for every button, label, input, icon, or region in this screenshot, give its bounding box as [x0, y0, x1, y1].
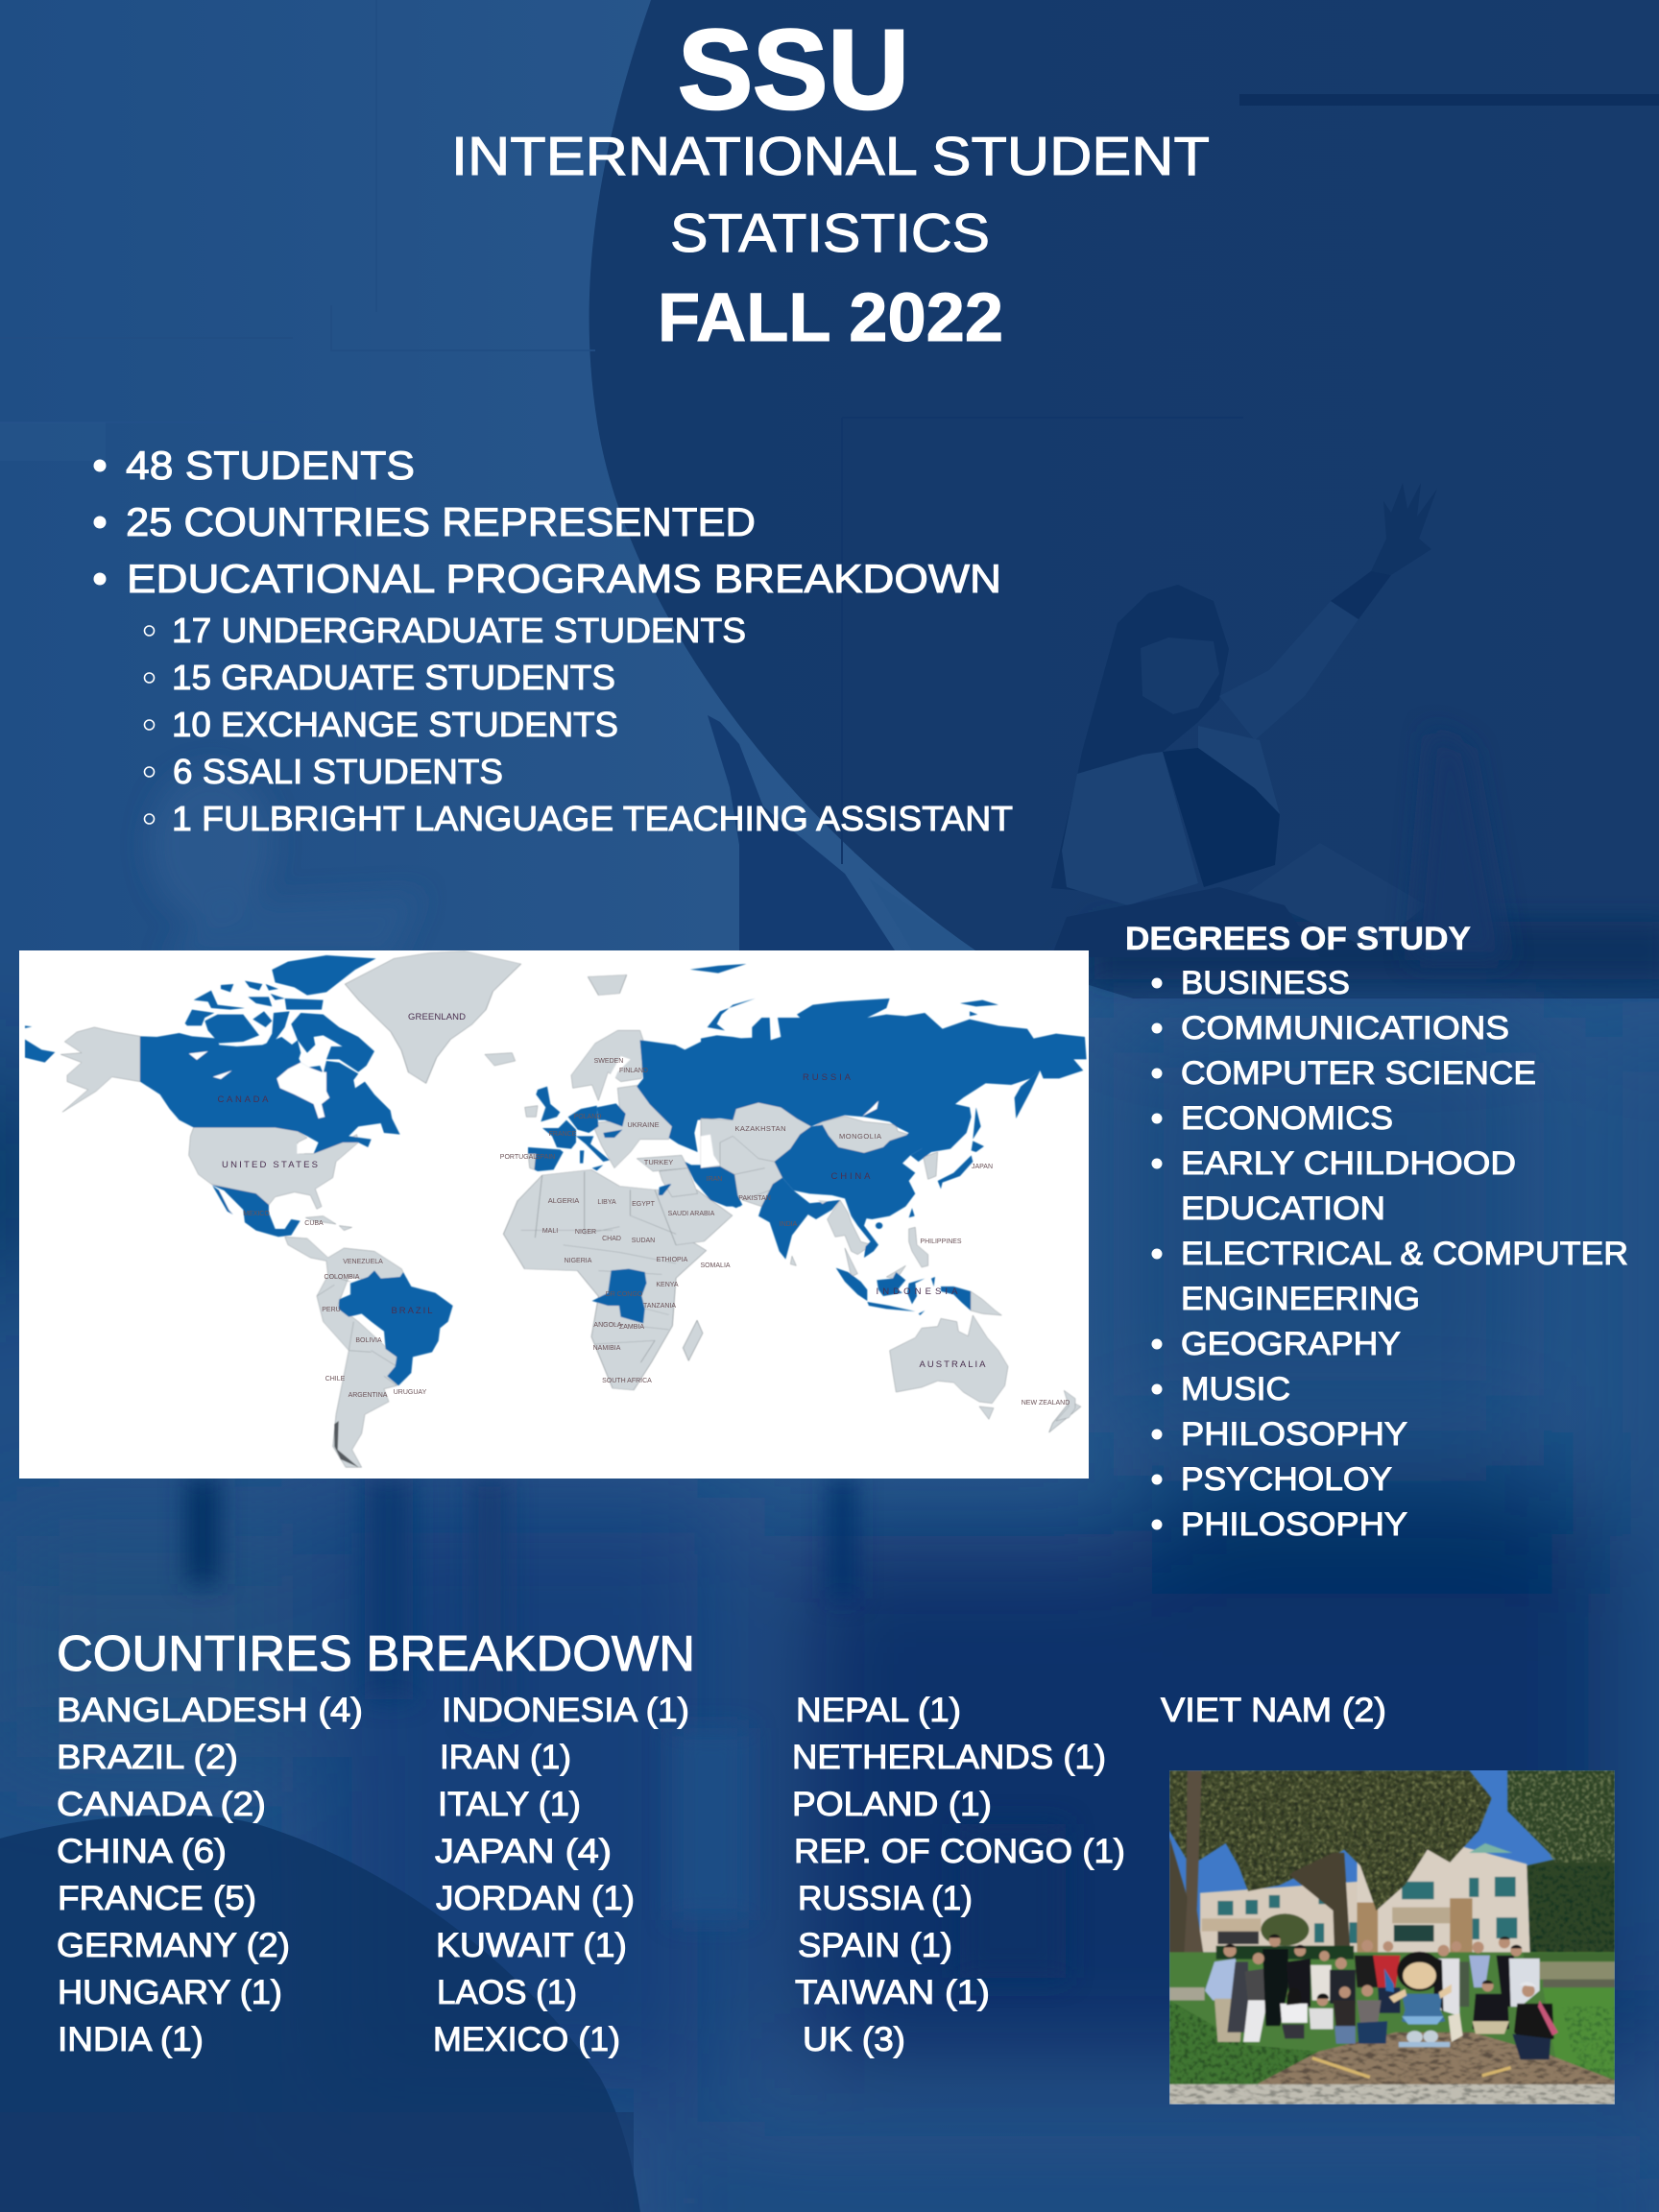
country column 1: GERMANY (2) [57, 1927, 290, 1964]
degrees list: BUSINESS [1181, 965, 1350, 1001]
mascot statue [1384, 1952, 1463, 2047]
country column 1: BANGLADESH (4) [57, 1692, 363, 1729]
map labels: KENYA [656, 1282, 679, 1288]
country column 2 [433, 1692, 689, 2058]
summary statistics list: 48 STUDENTS [126, 443, 415, 488]
map labels: SAUDI ARABIA [668, 1211, 715, 1217]
map labels: RUSSIA [803, 1072, 852, 1083]
degrees list: MUSIC [1181, 1371, 1290, 1407]
map labels: IRAN [707, 1176, 722, 1183]
country column 1: INDIA (1) [58, 2021, 204, 2058]
map labels: ETHIOPIA [657, 1257, 688, 1263]
map labels: SOUTH AFRICA [602, 1378, 652, 1384]
map labels: AUSTRALIA [920, 1359, 986, 1370]
map labels: KAZAKHSTAN [735, 1124, 785, 1133]
map labels: CHILE [325, 1376, 346, 1382]
Europe and Near East [485, 1030, 768, 1207]
map labels: LIBYA [597, 1199, 616, 1206]
map labels: JAPAN [972, 1164, 993, 1170]
heading: countires breakdown: COUNTIRES BREAKDOWN [57, 1626, 695, 1682]
map labels: FINLAND [619, 1068, 648, 1074]
map labels: GREENLAND [408, 1012, 466, 1022]
map labels: SWEDEN [594, 1058, 623, 1065]
map labels: PORTUGAL [500, 1154, 537, 1161]
subtitle: international student statistics: STATISTICS [670, 203, 990, 264]
country column 2: IRAN (1) [440, 1739, 571, 1776]
country column 3: POLAND (1) [792, 1786, 992, 1823]
map labels: NEW ZEALAND [1022, 1400, 1070, 1407]
degrees list: ELECTRICAL & COMPUTER [1181, 1236, 1628, 1272]
map labels: ANGOLA [593, 1322, 622, 1329]
map labels: NIGERIA [565, 1258, 592, 1264]
country column 3: REP. OF CONGO (1) [794, 1833, 1125, 1870]
educational programs sub-list: 6 SSALI STUDENTS [173, 752, 503, 791]
map labels: ZAMBIA [619, 1324, 644, 1331]
map labels: NIGER [575, 1229, 596, 1236]
map labels: FRANCE [549, 1131, 577, 1138]
country column 1: FRANCE (5) [58, 1880, 256, 1917]
classroom window frames [0, 0, 1243, 864]
country column 2: MEXICO (1) [433, 2021, 620, 2058]
decorative dark arc at lower left [0, 1815, 640, 2212]
map labels: DR CONGO [606, 1291, 643, 1298]
map labels: POLAND [574, 1114, 601, 1120]
dark bar at upper right [1239, 94, 1659, 106]
panel: world map of represented countries [19, 950, 1089, 1479]
map labels: CUBA [304, 1220, 324, 1227]
map labels: UNITED STATES [222, 1160, 318, 1170]
country column 2: JORDAN (1) [436, 1880, 635, 1917]
degrees list: COMPUTER SCIENCE [1181, 1055, 1536, 1092]
heading: degrees of study: DEGREES OF STUDY [1125, 921, 1471, 957]
map labels: MEXICO [243, 1211, 270, 1217]
Asia [701, 998, 1087, 1277]
map labels: TURKEY [644, 1158, 673, 1166]
map labels: ARGENTINA [349, 1392, 388, 1399]
country column 2: ITALY (1) [438, 1786, 581, 1823]
map labels: MONGOLIA [839, 1132, 881, 1141]
map labels: ALGERIA [548, 1196, 579, 1205]
map labels: CHAD [602, 1236, 621, 1242]
students [1205, 1935, 1558, 2059]
educational programs sub-list: 10 EXCHANGE STUDENTS [172, 705, 618, 744]
subtitle: fall 2022: FALL 2022 [658, 280, 1003, 356]
summary statistics list: EDUCATIONAL PROGRAMS BREAKDOWN [127, 556, 1001, 601]
country column 1: CANADA (2) [57, 1786, 266, 1823]
Southeast Asia and Oceania [836, 1265, 1075, 1421]
summary statistics list [94, 443, 1013, 838]
educational programs sub-list: 1 FULBRIGHT LANGUAGE TEACHING ASSISTANT [172, 799, 1013, 838]
degrees list: PHILOSOPHY [1181, 1506, 1407, 1543]
degrees list: PSYCHOLOY [1181, 1461, 1392, 1498]
country column 3: RUSSIA (1) [798, 1880, 973, 1917]
photo: group of international students at campus [1169, 1770, 1615, 2104]
map labels: URUGUAY [394, 1389, 427, 1396]
North America [25, 955, 400, 1237]
map labels: NAMIBIA [593, 1345, 621, 1352]
summary statistics list: 25 COUNTRIES REPRESENTED [126, 499, 756, 544]
map labels [217, 1012, 1070, 1407]
degrees list: EARLY CHILDHOOD [1181, 1145, 1516, 1182]
country column 3: UK (3) [803, 2021, 905, 2058]
country column 2: JAPAN (4) [435, 1833, 612, 1870]
degrees list: ENGINEERING [1181, 1281, 1420, 1317]
map labels: INDIA [780, 1221, 798, 1228]
map labels: PHILIPPINES [920, 1238, 962, 1245]
lighter wedge between hand and dark circle [869, 878, 975, 950]
map labels: VENEZUELA [343, 1259, 383, 1265]
raised hand silhouette at map top [708, 715, 895, 950]
map labels: SUDAN [632, 1238, 655, 1244]
map labels: BOLIVIA [355, 1337, 382, 1344]
country column 2: INDONESIA (1) [442, 1692, 689, 1729]
country column 4: VIET NAM (2) [1161, 1692, 1386, 1729]
educational programs sub-list [144, 611, 1013, 838]
educational programs sub-list: 15 GRADUATE STUDENTS [172, 658, 615, 697]
map labels: PAKISTAN [738, 1195, 771, 1202]
country column 1: CHINA (6) [57, 1833, 227, 1870]
map labels: CHINA [831, 1171, 871, 1182]
country column 2: KUWAIT (1) [436, 1927, 627, 1964]
educational programs sub-list: 17 UNDERGRADUATE STUDENTS [172, 611, 746, 650]
blurred raised hands and heads [149, 730, 1507, 1978]
woman presenter silhouette [1051, 483, 1437, 957]
subtitle: international student statistics [451, 126, 1210, 264]
degrees list: PHILOSOPHY [1181, 1416, 1407, 1453]
subtitle: international student statistics: INTERNATIONAL STUDENT [451, 126, 1210, 187]
map labels: PERU [322, 1307, 341, 1313]
building [1200, 1882, 1357, 1952]
country column 3: TAIWAN (1) [795, 1974, 990, 2011]
panel: countries breakdown [57, 1626, 1386, 2058]
map labels: EGYPT [632, 1201, 656, 1208]
degrees list [1152, 965, 1628, 1543]
map labels: SOMALIA [700, 1262, 731, 1269]
tree canopy [1169, 1770, 1492, 1911]
map labels: CANADA [217, 1094, 269, 1105]
map labels: BRAZIL [392, 1306, 432, 1316]
country column 1: HUNGARY (1) [58, 1974, 282, 2011]
country column 2: LAOS (1) [437, 1974, 577, 2011]
country column 3 [792, 1692, 1125, 2058]
degrees list: COMMUNICATIONS [1181, 1010, 1509, 1046]
map labels: COLOMBIA [325, 1274, 360, 1281]
lawn, path and sidewalk [1169, 1952, 1615, 2087]
degrees list: ECONOMICS [1181, 1100, 1393, 1137]
map labels: MALI [542, 1228, 558, 1235]
degrees list: GEOGRAPHY [1181, 1326, 1401, 1362]
South America and DR Congo [285, 1237, 646, 1467]
Greenland, Africa and Arabia base [345, 951, 1081, 1432]
country column 3: NEPAL (1) [796, 1692, 961, 1729]
map labels: SPAIN [536, 1154, 555, 1161]
panel: degrees of study [1125, 921, 1628, 1543]
country column 3: SPAIN (1) [798, 1927, 952, 1964]
map labels: TANZANIA [643, 1303, 676, 1310]
tree canopy at right [1507, 1770, 1615, 1956]
degrees list: EDUCATION [1181, 1190, 1385, 1227]
country column 3: NETHERLANDS (1) [792, 1739, 1106, 1776]
tree trunks [1176, 1770, 1214, 2030]
map labels: UKRAINE [627, 1120, 660, 1129]
country column 1 [57, 1692, 363, 2058]
title: SSU: SSU [678, 7, 909, 133]
decorative dark circle overlay at upper right [589, 0, 1659, 998]
map labels: INDONESIA [876, 1286, 958, 1297]
country column 1: BRAZIL (2) [57, 1739, 238, 1776]
